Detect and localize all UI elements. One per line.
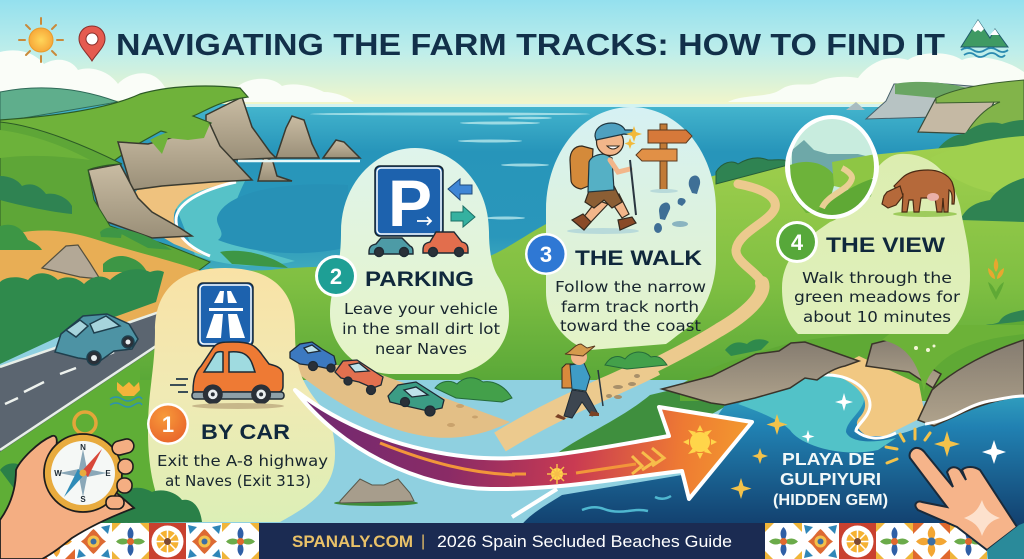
description: in the small dirt lot (342, 320, 500, 338)
white road stripe bottom (512, 489, 557, 517)
footer site: SPANALY.COM (292, 532, 413, 551)
panel: step 3 the walk (525, 107, 716, 350)
heading: THE VIEW (826, 234, 945, 257)
farm trail upper (736, 184, 775, 283)
footer divider: | (421, 533, 425, 550)
hiker (567, 123, 639, 234)
arrows (448, 179, 475, 227)
description: Leave your vehicle (344, 300, 498, 318)
badge 2 (315, 255, 357, 297)
signpost (636, 124, 692, 193)
boulder left (42, 245, 100, 279)
heading: BY CAR (201, 421, 290, 444)
hand holding compass (0, 412, 135, 559)
cuff (987, 523, 1024, 559)
parking sign (375, 166, 443, 240)
arm (610, 160, 630, 172)
hand sparkle (964, 500, 1000, 536)
compass needle (82, 449, 102, 477)
left green slope (0, 122, 210, 292)
right dark bushes (934, 120, 1024, 160)
footprints (654, 175, 700, 233)
badge 1: 1 (162, 412, 174, 437)
horizon band (240, 104, 940, 107)
white flowers (914, 344, 936, 352)
back hill left (0, 88, 118, 122)
water ripples (582, 496, 671, 512)
rocks right of cove (918, 340, 1024, 426)
fingers (106, 437, 135, 509)
sparkles on sea (730, 414, 960, 499)
footer guide: 2026 Spain Secluded Beaches Guide (437, 532, 732, 551)
tiles left (38, 523, 259, 559)
description: at Naves (Exit 313) (165, 472, 311, 490)
cove surf (820, 375, 896, 438)
description: Walk through the (802, 269, 952, 287)
torso (588, 154, 614, 192)
description (555, 278, 706, 335)
description: Follow the narrow (555, 278, 706, 296)
sea highlights (310, 112, 590, 220)
panel: step 1 by car (147, 268, 335, 522)
meadow central (140, 140, 1024, 380)
rock stacks (206, 97, 360, 181)
description (157, 452, 328, 490)
parked car green (388, 382, 444, 416)
dark bushes near cove (716, 158, 792, 184)
sun in arrow (683, 425, 717, 459)
icon: location pin (79, 26, 105, 61)
compass letters: W (54, 469, 62, 478)
sparkles (624, 126, 642, 149)
rocks left of cove (662, 336, 941, 405)
destination label: (HIDDEN GEM) (773, 492, 888, 509)
dark forest left (0, 269, 164, 364)
highway sign (198, 283, 253, 355)
description: near Naves (375, 340, 467, 358)
description (794, 269, 961, 326)
grass bush near hiker (605, 352, 667, 369)
white surf line (238, 160, 360, 162)
compass letters (54, 443, 111, 504)
tap rays (886, 429, 930, 463)
parked car blue (290, 342, 336, 372)
description: about 10 minutes (803, 308, 951, 326)
description: toward the coast (560, 317, 701, 335)
left slope light patch (0, 130, 90, 160)
hand (0, 436, 134, 559)
parking sign: P (388, 166, 432, 240)
car shadow (192, 403, 284, 409)
water icon small (110, 382, 142, 407)
shallow cove (738, 376, 896, 452)
road (0, 310, 165, 452)
dark bush behind compass (0, 463, 202, 523)
dirt parking lot (284, 361, 510, 438)
face (596, 128, 624, 156)
sea (0, 104, 1024, 294)
compass letters: N (80, 443, 86, 452)
dirt specks (447, 404, 478, 427)
right hill band (930, 136, 1024, 196)
bushes along orange (0, 225, 288, 272)
farm trail lower (500, 365, 655, 442)
bottom coastal green (680, 321, 1024, 401)
bay shallow water (175, 181, 295, 266)
lower sea (520, 373, 1024, 527)
compass face (51, 441, 115, 505)
small cars (369, 232, 468, 256)
cliff mid green patch (150, 124, 210, 154)
car: orange (192, 342, 284, 399)
sky background (0, 0, 1024, 106)
compass star (59, 449, 107, 497)
description: Exit the A-8 highway (157, 452, 328, 470)
pointing hand (886, 429, 1024, 559)
description (342, 300, 500, 358)
legs (583, 194, 629, 223)
shorts (585, 186, 622, 208)
boots (572, 214, 636, 230)
panel: step 4 the view (776, 117, 970, 334)
far right cliffs (846, 82, 982, 119)
orange hillside (0, 230, 230, 332)
parked car red (335, 360, 383, 394)
cove beach (827, 356, 925, 436)
right headland (918, 80, 1024, 140)
heading: THE WALK (575, 247, 702, 270)
compass ring (74, 412, 96, 434)
cow (882, 170, 955, 212)
small sun in shaft (547, 464, 567, 484)
left dark bushes upper (0, 176, 72, 214)
view circle (785, 117, 879, 217)
left green upper hill (0, 86, 248, 185)
icon: mountains and waves (961, 20, 1008, 57)
destination label: GULPIYURI (780, 469, 881, 489)
bush by trail (435, 378, 512, 402)
compass hub (80, 470, 86, 476)
rocks shadow (334, 500, 418, 506)
description: green meadows for (794, 288, 961, 306)
cliff mid (118, 124, 252, 190)
compass letters: S (80, 495, 86, 504)
panel: step 2 parking (315, 148, 509, 374)
route arrow (295, 390, 752, 499)
dark green below trail (555, 382, 728, 455)
heading: PARKING (365, 268, 474, 291)
beach (124, 181, 238, 256)
lower green meadow (0, 340, 155, 520)
badge 1 (147, 403, 189, 445)
bottom right bush (975, 310, 1024, 340)
badge 3: 3 (540, 242, 552, 267)
destination label (773, 449, 888, 509)
white sparkles (802, 393, 1006, 464)
rocks bottom (340, 479, 414, 503)
icon: sun (19, 18, 63, 62)
small hiker on trail (555, 344, 603, 420)
compass letters: E (105, 469, 111, 478)
backpack (570, 146, 593, 189)
cow shadow (893, 211, 957, 217)
arrow chevrons (632, 448, 664, 474)
badge 4: 4 (791, 230, 804, 255)
title: NAVIGATING THE FARM TRACKS: HOW TO FIND IT (116, 27, 945, 62)
cliff lower (88, 164, 192, 238)
cliff green top right (882, 325, 1024, 392)
badge 3 (525, 233, 567, 275)
clouds left (0, 50, 354, 102)
wheat icon (988, 258, 1004, 300)
farm trail middle (645, 283, 762, 370)
badge 2: 2 (330, 264, 342, 289)
badge 4 (776, 221, 818, 263)
compass body (44, 434, 122, 512)
tiles right (765, 523, 987, 559)
smile (607, 146, 619, 149)
car: teal left (55, 314, 138, 365)
destination label: PLAYA DE (782, 449, 875, 469)
parked cars row (290, 342, 444, 416)
middle dark bush (725, 339, 769, 356)
white coast line right (925, 396, 1024, 424)
footer bar (259, 523, 765, 559)
right dark bush lower (960, 178, 1024, 222)
car wheels (203, 384, 271, 404)
speed lines (170, 379, 188, 392)
clouds right (728, 53, 1024, 102)
cap (595, 123, 634, 140)
bay deeper water (217, 184, 348, 253)
description: farm track north (561, 298, 699, 316)
pole (630, 160, 636, 215)
beach surf (176, 182, 236, 256)
compass needle south (64, 469, 84, 497)
arrow stripe (380, 443, 636, 475)
trail pebbles (606, 374, 640, 399)
